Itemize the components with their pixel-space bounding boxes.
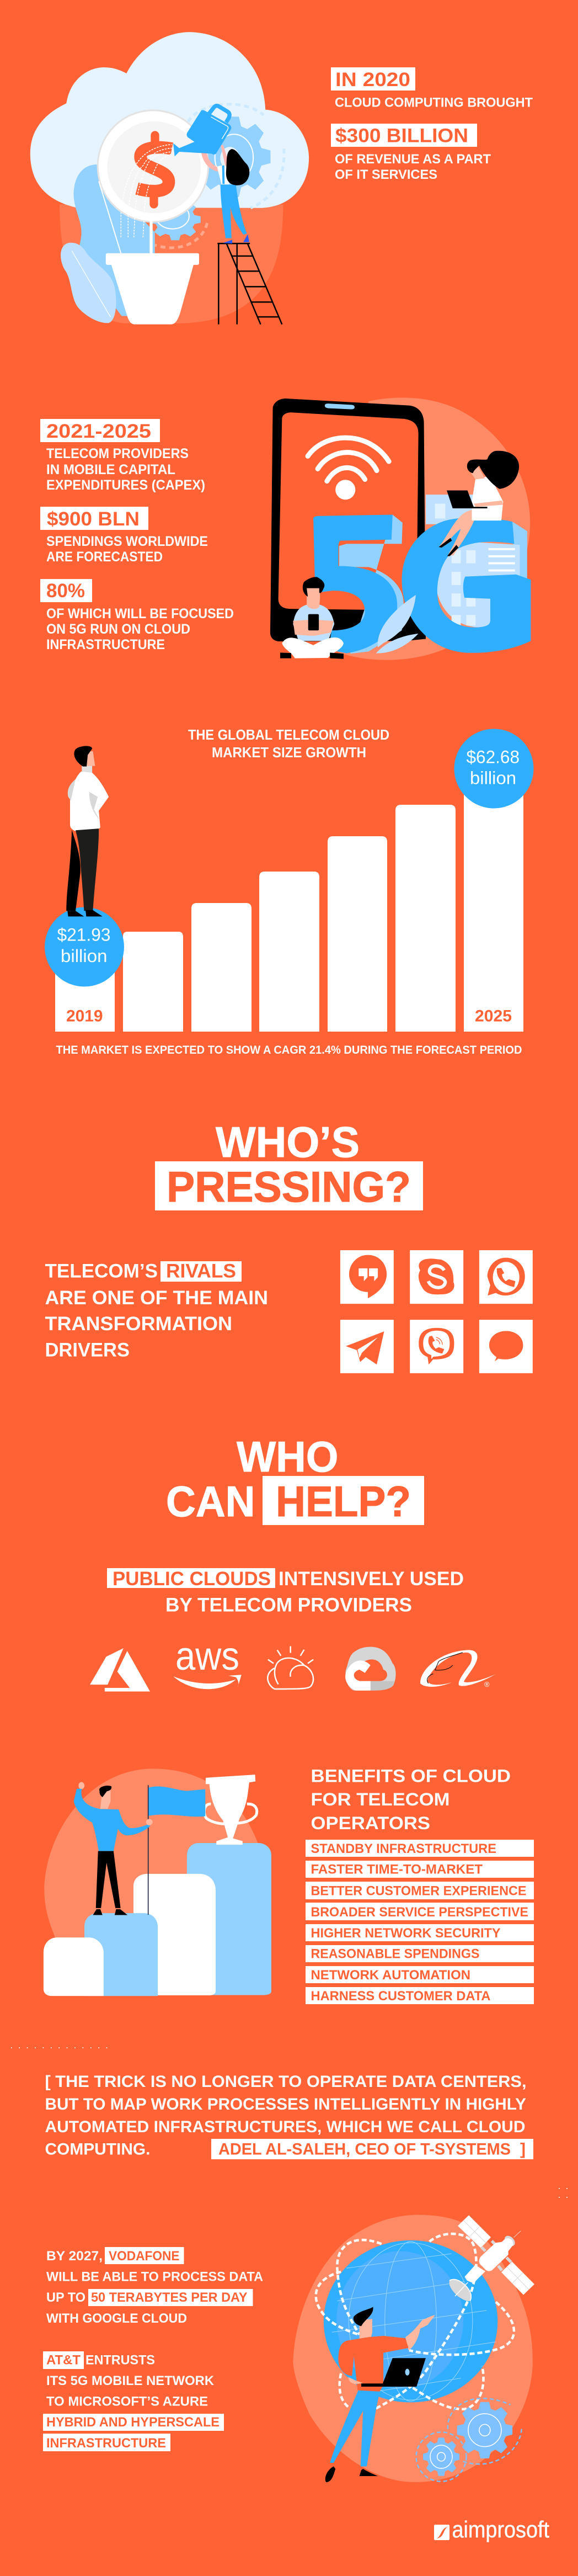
logo: alibaba (420, 1650, 496, 1687)
text: telecom's rivals: ARE ONE OF THE MAIN (45, 1287, 268, 1309)
callout: 21.93 billion: billion (61, 946, 107, 966)
callout: 21.93 billion (45, 907, 124, 987)
bar chart (55, 795, 523, 1032)
heading: benefits of cloud: OPERATORS (311, 1813, 430, 1833)
list: benefits (306, 1840, 534, 2004)
logo: azure (90, 1648, 150, 1692)
text: spendings worldwide (46, 534, 208, 565)
logo: ibm cloud (267, 1646, 313, 1689)
illustration: cloud, coin plant and ladder (30, 32, 309, 325)
text: telecom providers: EXPENDITURES (CAPEX) (46, 477, 205, 493)
text: 5G on cloud: INFRASTRUCTURE (46, 637, 165, 652)
text: cloud computing brought: CLOUD COMPUTING BROUGHT (335, 95, 533, 110)
heading: can: CAN (166, 1477, 255, 1526)
text: telecom's rivals: RIVALS (166, 1261, 236, 1282)
text: vodafone: 50 TERABYTES PER DAY (91, 2290, 247, 2305)
quote text: BUT TO MAP WORK PROCESSES INTELLIGENTLY IN HIGHLY (45, 2095, 526, 2113)
text: at&t: TO MICROSOFT’S AZURE (46, 2394, 208, 2409)
registered mark: ® (484, 1680, 490, 1688)
text: revenue note (335, 152, 491, 182)
text: cagr note: THE MARKET IS EXPECTED TO SHOW A CAGR 21.4% DURING THE FORECAST PERIOD (56, 1044, 522, 1056)
text: at&t (43, 2351, 224, 2451)
text: vodafone (46, 2247, 263, 2326)
text: vodafone: VODAFONE (109, 2249, 180, 2264)
heading: benefits of cloud: BENEFITS OF CLOUD (311, 1766, 511, 1786)
item (306, 1945, 534, 1962)
text: 5G on cloud: ON 5G RUN ON CLOUD (46, 622, 190, 637)
panel: market growth chart (45, 726, 534, 1056)
text: public clouds (107, 1568, 464, 1616)
year label 2019: 2019 (66, 1007, 103, 1026)
illustration: man with globe and gears (293, 2215, 533, 2482)
text: at&t: INFRASTRUCTURE (46, 2436, 166, 2451)
heading: who: WHO (237, 1432, 339, 1481)
heading: who's: WHO’S (216, 1118, 360, 1166)
panel: benefits (44, 1766, 534, 2004)
text: public clouds: BY TELECOM PROVIDERS (165, 1594, 412, 1616)
quote text: AUTOMATED INFRASTRUCTURES, WHICH WE CALL CLOUD (45, 2118, 525, 2136)
logo: google cloud (345, 1647, 396, 1691)
text: revenue note: OF REVENUE AS A PART (335, 152, 491, 167)
item: BROADER SERVICE PERSPECTIVE (311, 1905, 528, 1920)
logo: aws: aws (175, 1634, 239, 1679)
text: telecom providers: IN MOBILE CAPITAL (46, 462, 175, 477)
icon: whatsapp (479, 1250, 533, 1304)
item: NETWORK AUTOMATION (311, 1968, 470, 1983)
illustration: satellite (449, 2215, 534, 2301)
text: at&t: ENTRUSTS (85, 2352, 155, 2368)
panel: 2020 revenue (30, 32, 533, 325)
item (306, 1966, 534, 1983)
text: telecom's rivals: DRIVERS (45, 1339, 130, 1361)
text: revenue note: OF IT SERVICES (335, 167, 437, 182)
illustration: man standing on circle (66, 746, 109, 916)
text: at&t: ITS 5G MOBILE NETWORK (46, 2373, 215, 2388)
text: at&t: HYBRID AND HYPERSCALE (46, 2415, 220, 2430)
text: vodafone: UP TO (46, 2290, 85, 2305)
text: at&t: AT&T (46, 2352, 81, 2368)
text: spendings worldwide: ARE FORECASTED (46, 549, 163, 565)
heading: 80 percent: 80% (46, 580, 85, 602)
item: BETTER CUSTOMER EXPERIENCE (311, 1883, 526, 1899)
text: vodafone: BY 2027, (46, 2249, 103, 2264)
quote text: COMPUTING. (45, 2141, 150, 2158)
heading: 2021-2025: 2021-2025 (46, 421, 151, 442)
chart title: THE GLOBAL TELECOM CLOUD (188, 726, 389, 743)
item: REASONABLE SPENDINGS (311, 1946, 480, 1962)
quote attribution: ADEL AL-SALEH, CEO OF T-SYSTEMS (218, 2141, 511, 2158)
item: HIGHER NETWORK SECURITY (311, 1926, 501, 1941)
illustration: podium with flag and trophy (44, 1768, 271, 1996)
callout: 62.68 billion: billion (470, 768, 516, 788)
callout: 21.93 billion: $21.93 (57, 925, 110, 945)
panel: who can help (90, 1432, 496, 1692)
logos: cloud providers (90, 1634, 496, 1692)
text: public clouds: INTENSIVELY USED (279, 1568, 464, 1590)
item: STANDBY INFRASTRUCTURE (311, 1841, 496, 1856)
text: spendings worldwide: SPENDINGS WORLDWIDE (46, 534, 208, 549)
text: telecom's rivals (45, 1261, 268, 1361)
heading: in 2020: IN 2020 (335, 69, 410, 91)
callout: 62.68 billion: $62.68 (467, 747, 520, 767)
text: public clouds: PUBLIC CLOUDS (113, 1568, 271, 1590)
icon: viber (410, 1320, 463, 1373)
panel: quote (45, 2073, 533, 2159)
callout: 62.68 billion (454, 729, 534, 808)
icon: telegram (340, 1320, 394, 1373)
chart title: MARKET SIZE GROWTH (212, 744, 366, 761)
text: telecom's rivals: TELECOM’S (45, 1261, 158, 1282)
heading: 300 billion: $300 BILLION (335, 125, 468, 147)
icon: skype (410, 1250, 463, 1304)
year label 2025: 2025 (475, 1007, 512, 1026)
illustration: phone with 5G and people (270, 397, 531, 660)
quote text: [ THE TRICK IS NO LONGER TO OPERATE DATA CENTERS, (45, 2073, 527, 2091)
text: telecom providers: TELECOM PROVIDERS (46, 446, 189, 461)
heading: benefits of cloud: FOR TELECOM (311, 1789, 450, 1809)
text: telecom's rivals: TRANSFORMATION (45, 1313, 232, 1335)
panel: who's pressing (45, 1118, 533, 1373)
icon: dollar sign with water drops and woman with watering can (121, 106, 249, 237)
item: HARNESS CUSTOMER DATA (311, 1989, 491, 2004)
quote text (45, 2073, 527, 2158)
text: telecom providers (46, 446, 205, 493)
heading: benefits of cloud (311, 1766, 511, 1833)
item: FASTER TIME-TO-MARKET (311, 1862, 483, 1877)
heading: pressing: PRESSING? (167, 1162, 411, 1211)
text: vodafone: WILL BE ABLE TO PROCESS DATA (46, 2270, 263, 2284)
chart title (188, 726, 389, 761)
icons: messenger apps (340, 1250, 533, 1373)
text: 5G on cloud (46, 606, 234, 652)
text: vodafone: WITH GOOGLE CLOUD (46, 2311, 187, 2326)
panel: 5G capex (40, 397, 531, 660)
icon: chat bubble (479, 1320, 533, 1373)
icon: hangouts (340, 1250, 394, 1304)
item (306, 1861, 534, 1878)
quote attribution: ] (520, 2141, 526, 2158)
heading: help: HELP? (276, 1477, 411, 1526)
heading: 900 bln: $900 BLN (47, 508, 140, 530)
logo: aimprosoft: aimprosoft (452, 2516, 549, 2542)
heading: 80 percent (40, 579, 92, 602)
panel: vodafone and at&t (43, 2215, 549, 2542)
text: 5G on cloud: OF WHICH WILL BE FOCUSED (46, 606, 234, 622)
